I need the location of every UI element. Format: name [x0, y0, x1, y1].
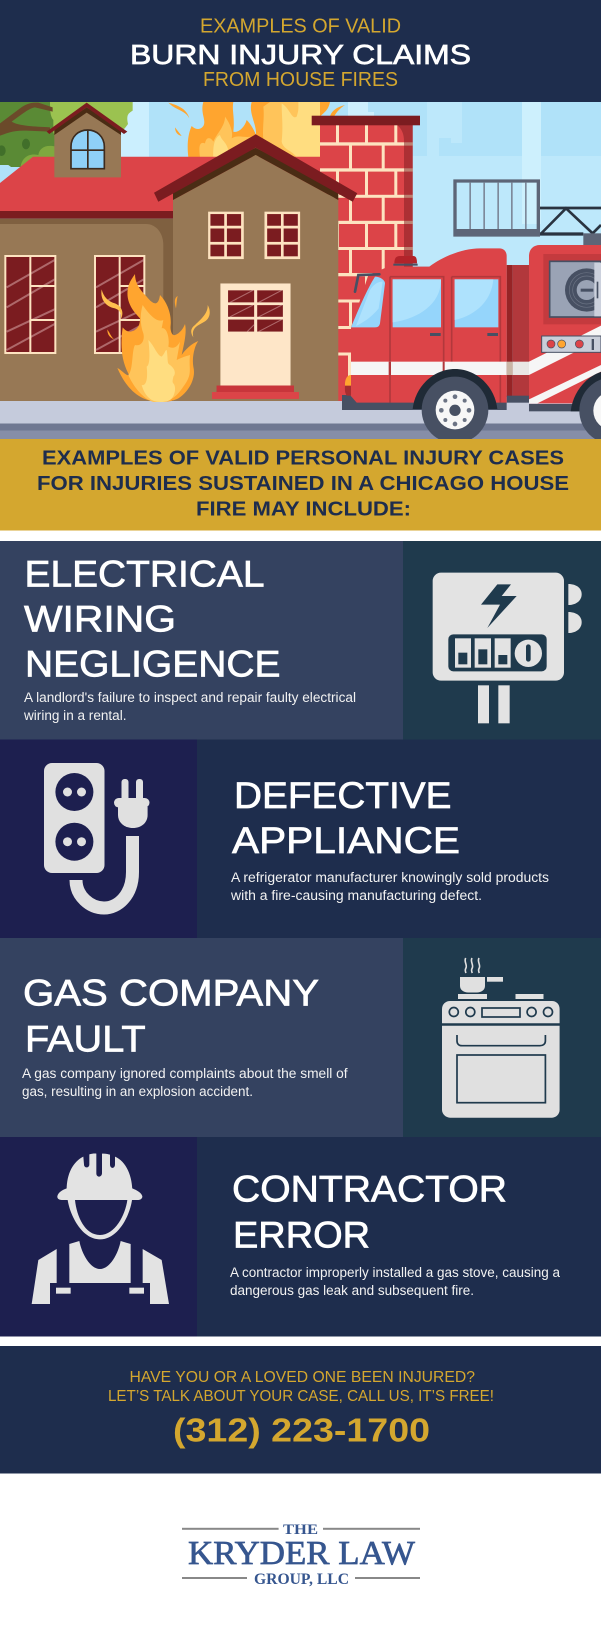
call to action banner: [0, 1346, 601, 1474]
heading: ELECTRICAL: [24, 554, 264, 595]
panel: defective appliance: [0, 740, 601, 938]
title line 1: EXAMPLES OF VALID: [200, 16, 401, 38]
front wheel: [413, 369, 497, 443]
heading: [232, 1169, 507, 1256]
description: A refrigerator manufacturer knowingly sold products: [231, 870, 549, 885]
icon: construction worker: [32, 1154, 169, 1304]
panel: gas company fault: [0, 938, 601, 1137]
description: A landlord's failure to inspect and repair faulty electrical: [24, 690, 356, 705]
bumper: [342, 395, 507, 410]
title line 2: BURN INJURY CLAIMS: [130, 39, 471, 70]
ground and road: [0, 401, 601, 440]
front house: [154, 134, 357, 402]
description: with a fire-causing manufacturing defect.: [230, 888, 482, 903]
gold subheading band: FOR INJURIES SUSTAINED IN A CHICAGO HOUSE: [37, 473, 569, 495]
white stripe: [351, 362, 507, 375]
gold subheading band: FIRE MAY INCLUDE:: [196, 498, 411, 520]
icon: electrical panel: [433, 573, 582, 723]
brick chimney: [312, 116, 420, 405]
front flames: [101, 274, 210, 402]
heading: [232, 775, 460, 861]
red roof and back wing: [0, 157, 320, 402]
call to action text line 2: LET’S TALK ABOUT YOUR CASE, CALL US, IT’S FREE!: [108, 1388, 494, 1405]
heading: [24, 554, 280, 685]
cab body: [351, 248, 507, 403]
description: dangerous gas leak and subsequent fire.: [230, 1283, 474, 1298]
heading: ERROR: [233, 1215, 370, 1256]
panel: contractor error: [0, 1137, 601, 1336]
heading: [23, 973, 319, 1060]
heading: GAS COMPANY: [23, 973, 319, 1014]
logo: The Kryder Law Group, LLC: [182, 1522, 420, 1588]
icon: gas stove: [442, 958, 560, 1118]
heading: WIRING: [24, 599, 176, 640]
front door: [212, 283, 299, 399]
heading: FAULT: [25, 1019, 146, 1060]
gold subheading band: [0, 439, 601, 530]
description: wiring in a rental.: [23, 708, 127, 723]
title line 3: FROM HOUSE FIRES: [203, 69, 398, 91]
description: [230, 1265, 560, 1298]
heading: NEGLIGENCE: [25, 644, 280, 685]
logo: The Kryder Law Group, LLC: THE: [283, 1522, 318, 1538]
logo: The Kryder Law Group, LLC: KRYDER LAW: [188, 1535, 416, 1572]
panel: electrical wiring negligence: [0, 541, 601, 740]
heading: APPLIANCE: [232, 820, 460, 861]
description: A gas company ignored complaints about the smell of: [22, 1066, 348, 1081]
flames behind roof: [168, 102, 345, 157]
gold subheading band: EXAMPLES OF VALID PERSONAL INJURY CASES: [42, 448, 564, 470]
fire truck: [342, 245, 601, 444]
description: gas, resulting in an explosion accident.: [22, 1084, 253, 1099]
siren: [394, 256, 417, 263]
upstairs windows: [208, 212, 300, 259]
mirror: [355, 274, 379, 292]
rear body: [529, 245, 601, 403]
heading: DEFECTIVE: [234, 775, 452, 816]
middle window: [95, 256, 144, 353]
header banner: [0, 0, 601, 102]
ground wing windows: [5, 256, 144, 353]
description: [22, 1066, 348, 1099]
icon: power strip and plug: [44, 763, 150, 908]
windows: [351, 277, 385, 327]
description: [230, 870, 549, 903]
description: A contractor improperly installed a gas stove, causing a: [230, 1265, 560, 1280]
tree: [0, 102, 133, 167]
left window: [5, 256, 55, 353]
logo: The Kryder Law Group, LLC: GROUP, LLC: [254, 1571, 349, 1588]
description: [23, 690, 356, 723]
illustration: house fire and fire truck: [0, 102, 601, 444]
phone number: (312) 223-1700: [173, 1412, 430, 1449]
heading: CONTRACTOR: [232, 1169, 507, 1210]
ladder platform: [453, 179, 601, 246]
call to action text: HAVE YOU OR A LOVED ONE BEEN INJURED?: [130, 1369, 475, 1386]
rear wheel: [571, 370, 601, 444]
dormer: [47, 103, 127, 177]
